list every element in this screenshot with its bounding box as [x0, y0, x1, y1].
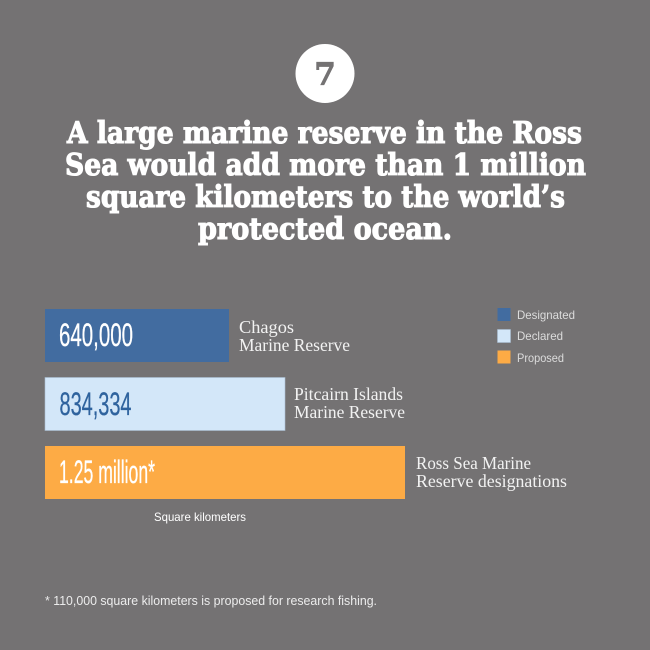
legend — [498, 308, 575, 365]
title: Sea would add more than 1 million — [65, 148, 586, 183]
label: Chagos: Marine Reserve — [239, 335, 350, 355]
label: Ross Sea — [416, 453, 567, 491]
footnote: * 110,000 square kilometers is proposed for research fishing. — [45, 593, 377, 608]
label: Pitcairn Islands: Marine Reserve — [294, 402, 405, 422]
axis caption: Square kilometers — [154, 510, 246, 524]
legend: proposed: Proposed — [517, 351, 564, 365]
number badge — [296, 44, 354, 103]
bar: Pitcairn Islands: 834,334 — [60, 386, 132, 422]
bar: Chagos — [45, 309, 229, 362]
label: Ross Sea: Reserve designations — [416, 471, 567, 491]
label: Chagos: Chagos — [239, 317, 294, 337]
bar: Chagos: 640,000 — [59, 317, 133, 353]
label: Ross Sea: Ross Sea Marine — [416, 453, 531, 473]
label: Pitcairn Islands: Pitcairn Islands — [294, 384, 403, 404]
label: Pitcairn Islands — [294, 384, 405, 422]
title — [65, 116, 586, 247]
legend: declared: Declared — [517, 329, 563, 343]
bar: Pitcairn Islands — [45, 378, 285, 430]
title: protected ocean. — [198, 212, 452, 247]
title: square kilometers to the world’s — [86, 180, 565, 215]
number badge: 7 — [314, 57, 336, 93]
title: A large marine reserve in the Ross — [66, 116, 582, 151]
bar: Ross Sea — [45, 446, 405, 499]
bar: Ross Sea: 1.25 million* — [59, 454, 155, 490]
legend: designated: Designated — [517, 308, 575, 322]
label: Chagos — [239, 317, 350, 355]
